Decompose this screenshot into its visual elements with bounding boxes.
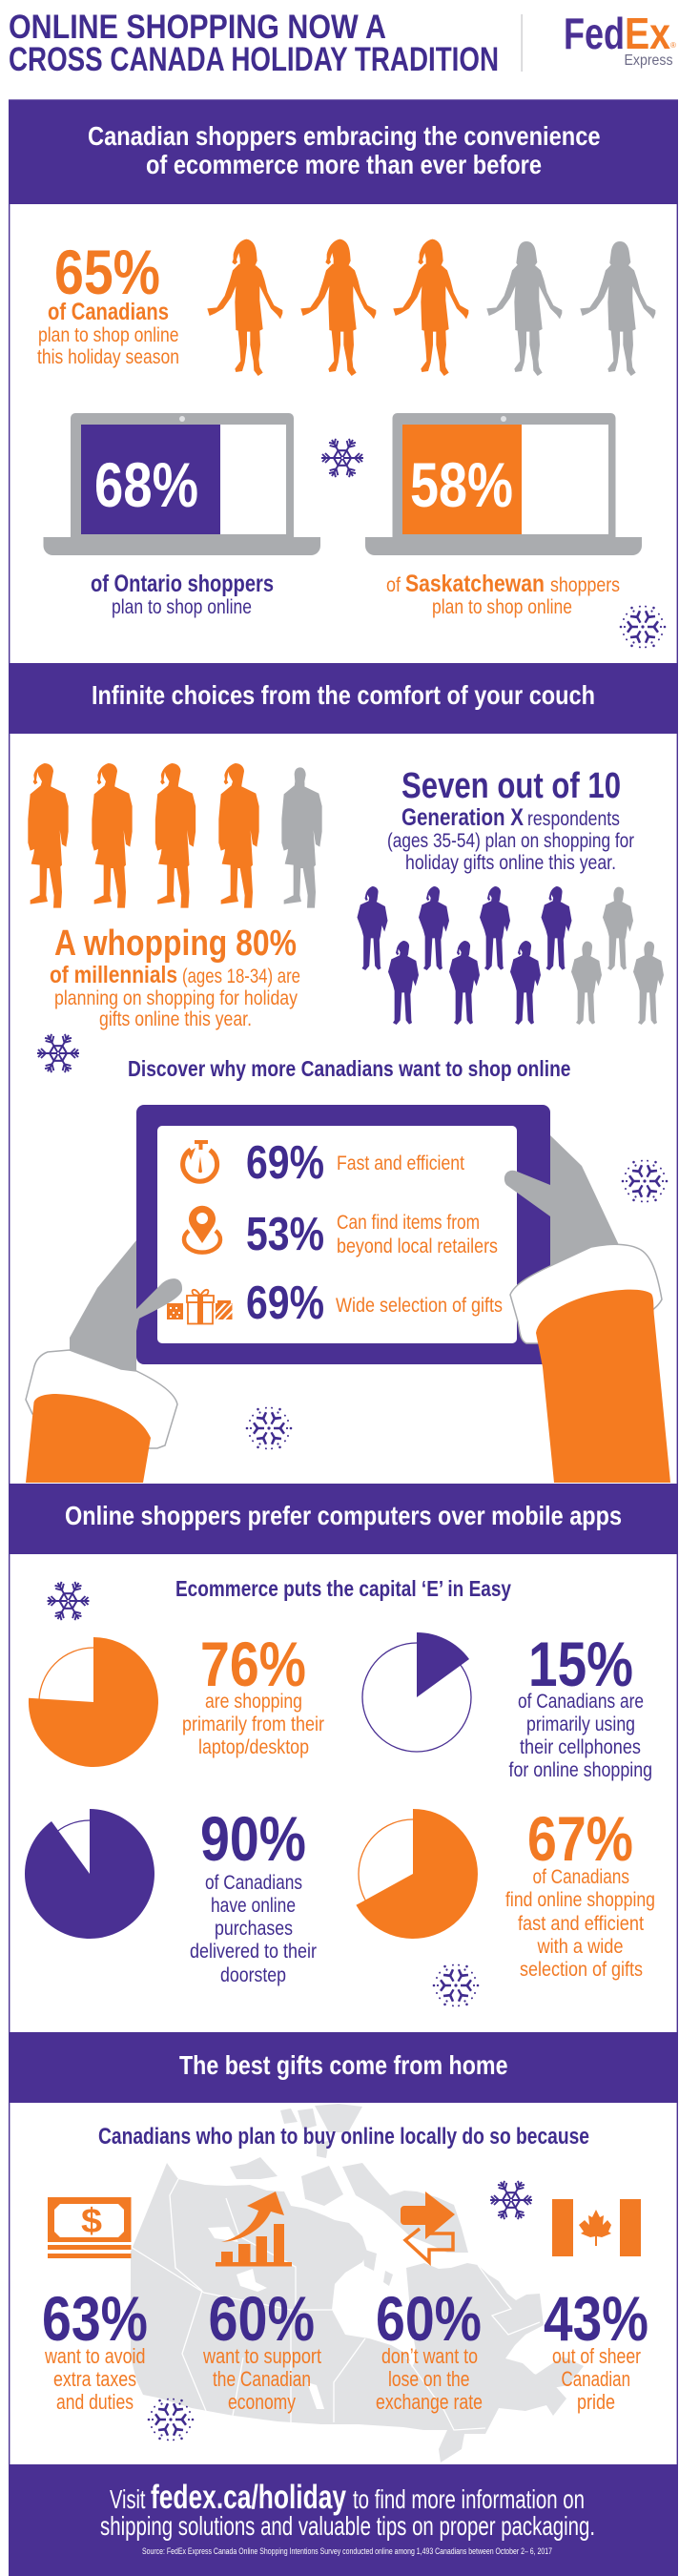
row text: 69% wide selection: 69% <box>246 1278 324 1329</box>
stat: 63% <box>42 2283 148 2414</box>
stat: 90%: doorstep <box>220 1964 286 1986</box>
laptop: Saskatchewan 58%: 58% <box>410 449 513 520</box>
icon: Canadian flag <box>552 2199 641 2256</box>
stat: 67%: of Canadians <box>532 1866 629 1888</box>
icon: snowflake <box>321 436 363 480</box>
text: seven out of 10: Seven out of 10 <box>401 766 621 806</box>
stat: 60% exchange <box>376 2283 483 2414</box>
header title <box>9 9 499 78</box>
cuff: right <box>510 1244 662 1343</box>
icon: snowflake <box>246 1403 292 1453</box>
text: Saskatchewan shoppers: Saskatchewan <box>405 571 545 597</box>
row text: 53% local retailers <box>246 1209 498 1260</box>
stat: 65% of Canadians: of Canadians <box>48 299 169 325</box>
icon: gifts <box>167 1290 233 1324</box>
sleeve: right <box>536 1290 670 1483</box>
icon: snowflake <box>490 2178 532 2222</box>
stat: 65% of Canadians <box>37 237 179 368</box>
text: seven out of 10: respondents <box>527 808 620 830</box>
pictogram: five men, four orange <box>28 763 322 908</box>
icon: snowflake <box>433 1961 479 2010</box>
pie chart: 76% <box>29 1637 158 1767</box>
laptop: Ontario 68% <box>44 413 320 555</box>
text: seven out of 10: holiday gifts online this year. <box>405 852 616 874</box>
text: seven out of 10 <box>387 766 634 874</box>
header title: ONLINE SHOPPING NOW A <box>9 9 386 46</box>
FedEx Express logo <box>564 9 676 69</box>
icon: snowflake <box>48 1579 90 1623</box>
header title: CROSS CANADA HOLIDAY TRADITION <box>9 41 499 78</box>
text: Saskatchewan shoppers: plan to shop online <box>432 596 572 618</box>
stat: 43% <box>544 2283 648 2414</box>
banner: infinite choices: Infinite choices from the comfort of your couch <box>92 680 595 710</box>
footer <box>9 2464 678 2576</box>
stat: 65% of Canadians: 65% <box>54 237 160 307</box>
stat: 90%: purchases <box>215 1918 293 1940</box>
text: a whopping 80%: planning on shopping for holiday <box>54 987 298 1009</box>
stat: 60% support: want to support <box>202 2344 321 2368</box>
pie chart: 67% <box>356 1809 478 1939</box>
laptop: Ontario 68%: 68% <box>94 449 198 520</box>
banner: convenience: Canadian shoppers embracing the convenience <box>88 121 601 151</box>
text: Ontario shoppers: of Ontario shoppers <box>91 571 274 597</box>
banner: convenience: of ecommerce more than ever before <box>146 150 542 179</box>
pie chart: 15% <box>362 1632 471 1752</box>
stat: 15%: of Canadians are <box>518 1691 644 1713</box>
stat: 43%: out of sheer <box>552 2344 641 2368</box>
FedEx Express logo: Express <box>624 52 673 69</box>
stat: 67%: selection of gifts <box>520 1959 643 1981</box>
text: a whopping 80%: of millennials <box>50 962 177 988</box>
stat: 76% <box>182 1629 324 1758</box>
stat: 63%: extra taxes <box>53 2367 136 2391</box>
icon: snowflake <box>148 2395 194 2444</box>
text: a whopping 80%: gifts online this year. <box>99 1008 252 1030</box>
stat: 15% <box>509 1629 652 1781</box>
map province lines and lakes <box>131 2179 540 2430</box>
map lakes <box>208 2227 324 2409</box>
stat: 90% <box>190 1803 317 1986</box>
FedEx Express logo: ® <box>670 41 676 50</box>
illustration: hands behind tablet <box>70 1135 619 1371</box>
row text: 69% fast and efficient: 69% <box>246 1137 324 1189</box>
icon: stopwatch <box>183 1142 217 1181</box>
stat: 67%: find online shopping <box>505 1889 655 1911</box>
row text: 69% fast and efficient <box>246 1137 464 1189</box>
stat: 15%: for online shopping <box>509 1759 652 1781</box>
row text: 69% wide selection: Wide selection of gifts <box>336 1295 503 1317</box>
stat: 90%: 90% <box>200 1803 306 1874</box>
stat: 60% exchange: 60% <box>376 2283 482 2354</box>
stat: 76%: are shopping <box>205 1691 302 1713</box>
FedEx Express logo: Ex <box>625 9 670 58</box>
text: seven out of 10: (ages 35-54) plan on shopping for <box>387 830 634 852</box>
stat: 43%: pride <box>577 2390 615 2414</box>
text: Saskatchewan shoppers <box>386 571 620 618</box>
icon: money: $ <box>81 2201 102 2240</box>
icon: snowflake <box>37 1031 79 1075</box>
sleeve: left <box>26 1394 151 1483</box>
stat: 67%: with a wide <box>537 1936 624 1958</box>
footer: Source: FedEx Express Canada Online Shopping Intentions Survey conducted online among 1,493 Canadians between October 2– 6, 2017 <box>142 2546 552 2556</box>
text: Ontario shoppers: plan to shop online <box>112 596 252 618</box>
laptop: Saskatchewan 58% <box>365 413 642 555</box>
stat: 60% exchange: don’t want to <box>381 2344 478 2368</box>
footer: to find more information on <box>353 2484 585 2514</box>
stat: 15%: their cellphones <box>520 1736 641 1758</box>
thumb: left hand <box>136 1278 182 1331</box>
stat: 60% exchange: exchange rate <box>376 2390 483 2414</box>
pictogram: ten people, seven purple <box>357 886 664 1025</box>
row text: 69% wide selection <box>246 1278 503 1329</box>
icon: map pin <box>184 1206 220 1253</box>
footer: Visit <box>110 2484 146 2514</box>
stat: 90%: delivered to their <box>190 1941 317 1963</box>
stat: 65% of Canadians: this holiday season <box>37 346 179 368</box>
cuff: left <box>26 1350 177 1448</box>
banner: infinite choices <box>9 663 678 734</box>
icon: money <box>48 2197 132 2258</box>
row text: 53% local retailers: 53% <box>246 1209 324 1260</box>
banner: convenience <box>9 100 678 204</box>
stat: 60% support: 60% <box>208 2283 315 2354</box>
banner: best gifts <box>9 2032 678 2103</box>
row text: 53% local retailers: Can find items from <box>337 1212 480 1234</box>
stat: 90%: have online <box>211 1895 296 1917</box>
text: a whopping 80%: A whopping 80% <box>54 924 297 964</box>
stat: 63%: 63% <box>42 2283 148 2354</box>
FedEx Express logo: Fed <box>564 9 625 58</box>
stat: 90%: of Canadians <box>205 1872 302 1894</box>
subheading: ecommerce easy: Ecommerce puts the capital ‘E’ in Easy <box>175 1576 511 1601</box>
text: Ontario shoppers <box>91 571 274 618</box>
row text: 69% fast and efficient: Fast and efficient <box>337 1153 464 1174</box>
icon: rising chart <box>216 2192 292 2267</box>
stat: 67%: 67% <box>527 1803 633 1874</box>
stat: 63%: and duties <box>56 2390 134 2414</box>
stat: 43%: Canadian <box>561 2367 630 2391</box>
text: Saskatchewan shoppers: of <box>386 574 401 596</box>
stat: 15%: primarily using <box>526 1714 635 1735</box>
subheading: discover why: Discover why more Canadians want to shop online <box>128 1056 570 1081</box>
stat: 60% support: economy <box>228 2390 296 2414</box>
text: a whopping 80%: (ages 18-34) are <box>182 966 300 987</box>
pie chart: 90% <box>25 1809 154 1939</box>
stat: 60% support: the Canadian <box>213 2367 311 2391</box>
text: a whopping 80% <box>50 924 300 1030</box>
footer: fedex.ca/holiday <box>151 2479 346 2516</box>
banner: best gifts: The best gifts come from home <box>179 2050 507 2080</box>
icon: snowflake <box>622 1156 668 1206</box>
stat: 67%: fast and efficient <box>518 1913 644 1935</box>
row text: 53% local retailers: beyond local retailers <box>337 1236 498 1257</box>
tablet <box>136 1105 550 1364</box>
stat: 15%: 15% <box>528 1629 633 1699</box>
icon: snowflake <box>620 602 666 652</box>
stat: 76%: laptop/desktop <box>198 1736 309 1758</box>
stat: 63%: want to avoid <box>44 2344 145 2368</box>
stat: 76%: 76% <box>200 1629 306 1699</box>
stat: 67% <box>505 1803 655 1981</box>
thumb: right hand <box>504 1171 550 1216</box>
stat: 76%: primarily from their <box>182 1714 324 1735</box>
map of Canada <box>131 2104 584 2462</box>
stat: 65% of Canadians: plan to shop online <box>38 324 179 346</box>
text: seven out of 10: Generation X <box>401 804 524 831</box>
stat: 60% support <box>202 2283 321 2414</box>
banner: computers over mobile <box>9 1484 678 1554</box>
stat: 60% exchange: lose on the <box>388 2367 469 2391</box>
text: Saskatchewan shoppers: shoppers <box>550 574 620 596</box>
pictogram: five women, three orange <box>207 239 655 376</box>
stat: 43%: 43% <box>544 2283 648 2354</box>
icon: exchange arrows <box>401 2192 455 2262</box>
